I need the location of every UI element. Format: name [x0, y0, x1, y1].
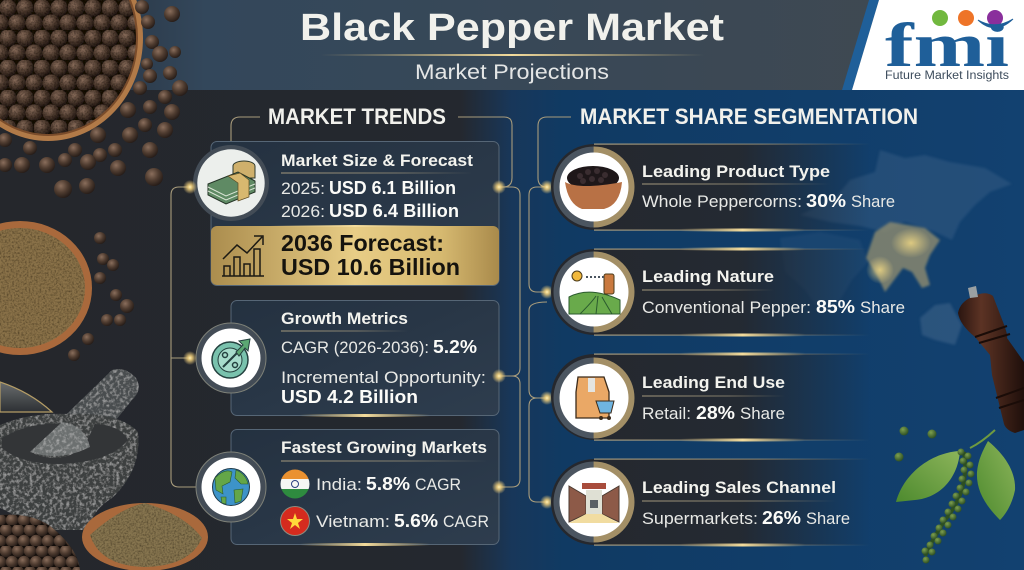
subtitle: Market Projections — [415, 61, 609, 84]
flag: India — [280, 469, 310, 499]
decorative: gold arc — [0, 382, 52, 412]
segment: leading end use — [551, 352, 870, 442]
chart icon — [222, 236, 264, 276]
world map backdrop — [780, 150, 1012, 345]
segment: leading sales channel: Supermarkets: — [642, 509, 758, 528]
heading: market share segmentation: MARKET SHARE SEGMENTATION — [580, 104, 918, 129]
incremental value: USD 4.2 Billion — [281, 387, 418, 407]
CAGR value: CAGR (2026-2036): — [281, 338, 429, 357]
2026 value: 2026: — [281, 202, 325, 221]
segment: leading nature: 85% — [816, 297, 855, 317]
India row: 5.8% — [366, 474, 410, 494]
decorative: peppercorn pile bottom left — [0, 515, 80, 570]
segment: leading sales channel: 26% — [762, 508, 801, 528]
icon: parcel and shopping cart — [576, 377, 614, 420]
segment: leading nature — [551, 248, 905, 336]
icon: supermarket aisle — [569, 483, 619, 523]
segment: leading sales channel — [551, 458, 870, 546]
India row: CAGR — [415, 475, 461, 494]
header band — [0, 0, 1024, 90]
decorative: green pepper sprig — [894, 426, 1015, 564]
title: Black Pepper Market — [300, 7, 724, 49]
panel: growth metrics — [196, 300, 499, 417]
India row: India: — [316, 475, 362, 494]
Vietnam row: CAGR — [443, 512, 489, 531]
panel heading: Market Size & Forecast — [281, 151, 473, 170]
incremental opportunity: Incremental Opportunity: — [281, 368, 486, 387]
segment: leading end use: Leading End Use — [642, 373, 785, 392]
panel heading: Growth Metrics — [281, 309, 408, 328]
panel heading: Fastest Growing Markets — [281, 438, 487, 457]
title divider — [320, 54, 704, 56]
percent growth icon — [196, 323, 266, 393]
decorative: ground pepper bowl — [0, 221, 92, 355]
segment: leading end use: Retail: — [642, 404, 691, 423]
panel: market size and forecast — [193, 142, 499, 286]
icon: farm field sprayer — [569, 271, 620, 314]
globe icon — [196, 452, 266, 522]
connector glow dots — [183, 180, 554, 509]
decorative: mortar and pestle — [0, 369, 139, 530]
Vietnam row: Vietnam: — [316, 512, 390, 531]
decorative: pepper mill — [958, 286, 1024, 433]
decorative: peppercorn bowl — [0, 0, 145, 141]
2036 forecast callout: USD 10.6 Billion — [281, 254, 460, 280]
segment: leading sales channel: Share — [806, 509, 850, 528]
segment: leading product type — [551, 144, 895, 232]
segment: leading end use: Share — [740, 404, 785, 423]
panel: fastest growing markets — [196, 430, 499, 546]
segment: leading nature: Conventional Pepper: — [642, 298, 811, 317]
2036 forecast callout: 2036 Forecast: — [281, 230, 444, 256]
segment: leading product type: 30% — [806, 191, 846, 211]
Vietnam row — [280, 506, 489, 536]
flag: Vietnam — [280, 506, 310, 536]
decorative: saucer of ground pepper — [82, 503, 208, 570]
heading: market trends: MARKET TRENDS — [268, 104, 446, 129]
2025 value: 2025: — [281, 179, 325, 198]
segment: leading end use: 28% — [696, 403, 735, 423]
CAGR value: 5.2% — [433, 337, 477, 357]
segment: leading nature: Share — [860, 298, 905, 317]
connector lines — [171, 117, 571, 502]
icon: bowl of peppercorns — [565, 166, 622, 209]
segment: leading product type: Whole Peppercorns: — [642, 192, 802, 211]
Vietnam row: 5.6% — [394, 511, 438, 531]
segment: leading nature: Leading Nature — [642, 267, 774, 286]
2026 value: USD 6.4 Billion — [329, 201, 459, 221]
logo: Future Market Insights: Future Market Insights — [885, 70, 1009, 82]
segment: leading product type: Share — [851, 192, 895, 211]
money icon — [193, 145, 269, 221]
2036 forecast callout — [211, 225, 499, 285]
India row — [280, 469, 461, 499]
2025 value: USD 6.1 Billion — [329, 178, 456, 198]
segment: leading product type: Leading Product Type — [642, 162, 830, 181]
logo: Future Market Insights: fmi — [885, 12, 1009, 80]
logo: Future Market Insights — [842, 0, 1024, 90]
decorative: scattered peppercorns — [0, 0, 188, 361]
segment: leading sales channel: Leading Sales Channel — [642, 478, 836, 497]
